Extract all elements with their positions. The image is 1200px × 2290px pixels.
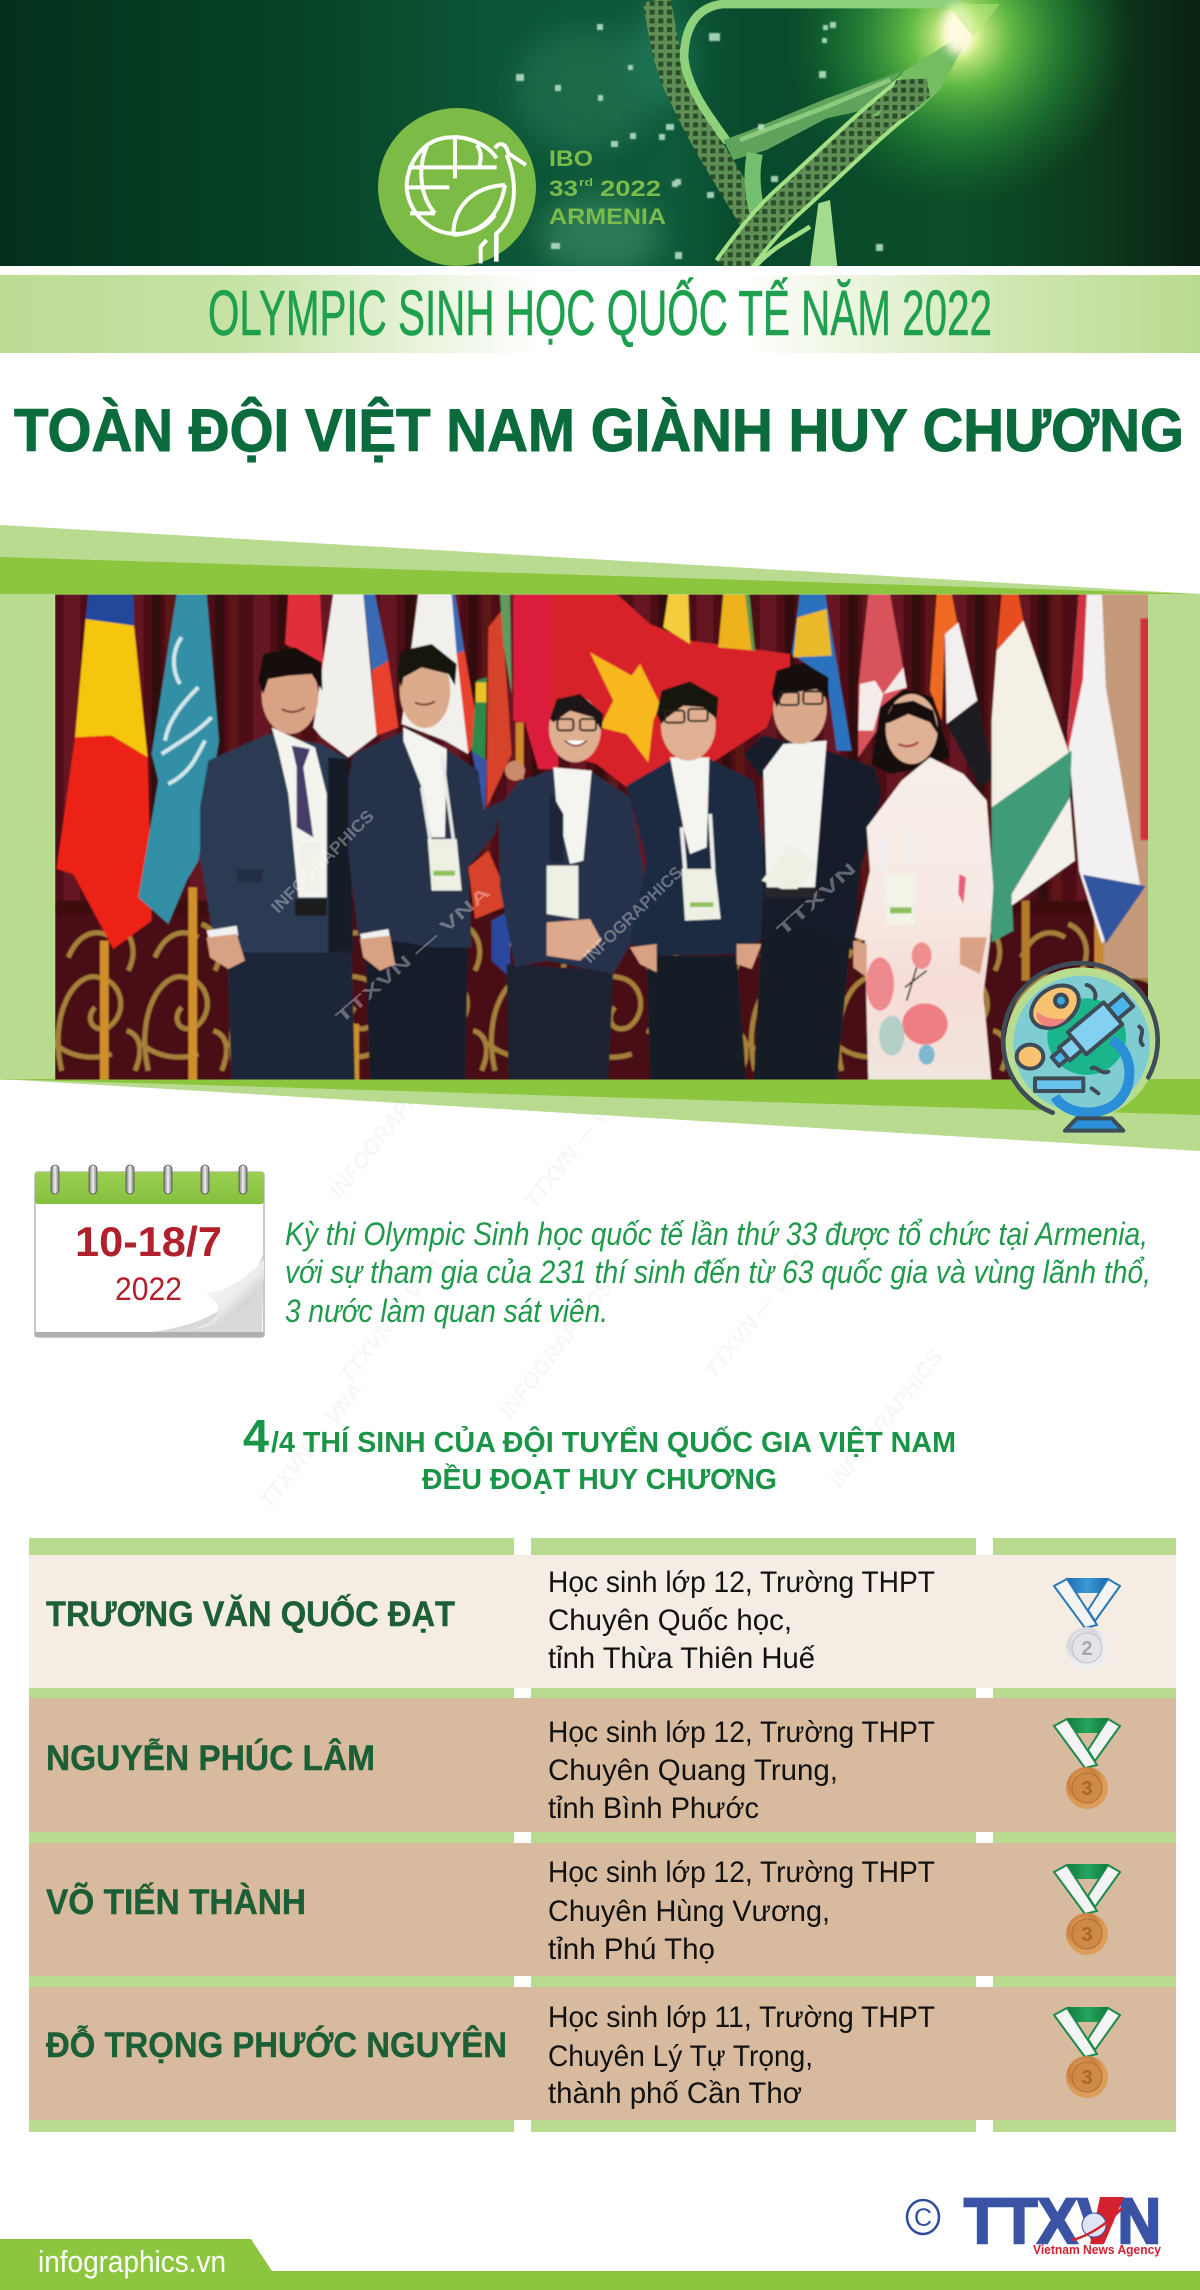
top green wedge <box>0 557 1200 594</box>
globe accent <box>1072 2197 1124 2244</box>
school <box>548 1566 935 1675</box>
faint watermarks: TTXVN — VNA <box>254 1377 368 1513</box>
intro paragraph: 3 nước làm quan sát viên. <box>285 1293 608 1329</box>
faint watermarks: TTXVN — VNA <box>699 1247 813 1383</box>
logo text: 33 <box>549 176 578 201</box>
icon: bronze medal <box>1054 2007 1120 2098</box>
year: 2022 <box>115 1271 182 1307</box>
person: man 4 <box>627 681 767 1084</box>
icon: bronze medal: 3 <box>1081 1778 1093 1800</box>
soft background light <box>515 10 690 275</box>
faint watermarks: INFOGRAPHICS <box>824 1345 948 1493</box>
results heading: /4 THÍ SINH CỦA ĐỘI TUYỂN QUỐC GIA VIỆT NAM <box>271 1425 956 1459</box>
bottom green wedge <box>0 1079 1200 1115</box>
DNA helix <box>657 0 1133 270</box>
faint watermarks: TTXVN — VNA <box>334 1252 448 1388</box>
school: tỉnh Phú Thọ <box>548 1933 715 1966</box>
school: thành phố Cần Thơ <box>548 2077 802 2110</box>
school: tỉnh Thừa Thiên Huế <box>548 1642 815 1675</box>
top light wedge <box>0 525 1200 594</box>
glow <box>804 0 1120 186</box>
results table <box>29 1538 1176 2132</box>
emblem disc <box>378 108 536 266</box>
logo: IBO emblem <box>378 108 666 266</box>
school <box>548 2001 935 2110</box>
person: man 2 <box>348 644 502 1084</box>
subtitle band <box>0 275 1200 353</box>
copyright mark: C <box>914 2204 932 2232</box>
icon: bronze medal: 3 <box>1081 2067 1093 2089</box>
date: 10-18/7 <box>75 1218 222 1265</box>
icon: bronze medal: 3 <box>1081 1924 1093 1946</box>
icon: silver medal: 2 <box>1081 1638 1093 1660</box>
faint watermarks <box>254 985 948 1513</box>
school <box>548 1856 935 1966</box>
separator bars <box>29 1538 1176 2132</box>
faint watermarks: INFOGRAPHICS <box>324 1055 448 1203</box>
wall and far-right flag <box>1066 594 1148 979</box>
logo text: ARMENIA <box>549 204 666 229</box>
school: Học sinh lớp 12, Trường THPT <box>548 1716 935 1749</box>
page curl <box>150 1250 264 1332</box>
faint watermarks: INFOGRAPHICS <box>784 985 908 1133</box>
microscope <box>1035 989 1137 1131</box>
faint watermarks: TTXVN — VNA <box>519 1077 633 1213</box>
footer bar <box>0 2239 1200 2290</box>
person: man 3 <box>498 694 643 1084</box>
calendar page <box>35 1172 264 1337</box>
bacteria <box>1017 977 1143 1093</box>
person: woman in ao dai <box>853 689 993 1084</box>
left mesh strand <box>657 0 753 220</box>
row 2 <box>46 1716 1120 1825</box>
logo text: 2022 <box>600 176 661 201</box>
school: Học sinh lớp 11, Trường THPT <box>548 2001 935 2034</box>
school: Học sinh lớp 12, Trường THPT <box>548 1566 935 1599</box>
icon: calendar with date <box>35 1165 264 1337</box>
photo watermarks: INFOGRAPHICS <box>267 807 378 917</box>
banner background <box>0 0 1200 266</box>
agency tagline: Vietnam News Agency <box>1033 2242 1162 2257</box>
floating particles <box>516 22 883 259</box>
bottom light wedge <box>0 1079 1200 1151</box>
results heading: 4 <box>243 1410 269 1462</box>
globe and crane <box>407 137 526 263</box>
inner stem <box>753 153 758 217</box>
name: TRƯƠNG VĂN QUỐC ĐẠT <box>46 1594 455 1634</box>
side panels <box>0 594 1200 1080</box>
upper loop <box>684 4 960 142</box>
row 3 <box>46 1856 1120 1966</box>
copyright mark <box>907 2200 939 2234</box>
crossing leaf band <box>723 72 900 160</box>
logo text: IBO <box>549 146 593 171</box>
team photo <box>55 591 1156 1084</box>
row backgrounds <box>29 1555 1176 1688</box>
intro paragraph <box>285 1216 1151 1329</box>
bar with tab <box>0 2239 1200 2290</box>
agency letters: TTXVN <box>964 2185 1161 2257</box>
school: Chuyên Lý Tự Trọng, <box>548 2040 813 2073</box>
row 4 <box>46 2001 1120 2110</box>
band background <box>0 275 1200 353</box>
school <box>548 1716 935 1825</box>
school: Học sinh lớp 12, Trường THPT <box>548 1856 935 1889</box>
name: NGUYỄN PHÚC LÂM <box>46 1738 375 1778</box>
logo: TTXVN <box>907 2185 1162 2257</box>
main band with mesh <box>730 90 913 270</box>
school: Chuyên Quốc học, <box>548 1604 792 1637</box>
faint watermarks: INFOGRAPHICS <box>494 1275 618 1423</box>
dress flowers <box>866 942 948 1065</box>
photo watermarks: INFOGRAPHICS <box>580 863 686 967</box>
website: infographics.vn <box>38 2244 226 2279</box>
photo frame with green wedges <box>0 525 1200 1151</box>
bright flare <box>942 5 974 55</box>
icon: silver medal <box>1054 1578 1120 1669</box>
icon: bronze medal <box>1054 1718 1120 1809</box>
icon: microscope badge <box>1003 963 1158 1131</box>
person: man 1 <box>200 647 355 1084</box>
lower stem <box>810 200 837 267</box>
binder rings <box>51 1165 247 1194</box>
logo text <box>550 150 666 224</box>
photo watermarks <box>267 807 860 1027</box>
name: VÕ TIẾN THÀNH <box>46 1882 306 1922</box>
photo watermarks: TTXVN — VNA <box>332 883 494 1027</box>
header banner <box>0 0 1200 275</box>
school: Chuyên Quang Trung, <box>548 1754 838 1787</box>
calendar header <box>35 1172 264 1204</box>
photo watermarks: TTXVN <box>773 859 860 940</box>
school: Chuyên Hùng Vương, <box>548 1895 830 1928</box>
person: man 5 <box>743 662 882 1084</box>
name: ĐỖ TRỌNG PHƯỚC NGUYÊN <box>46 2025 507 2065</box>
results heading: ĐỀU ĐOẠT HUY CHƯƠNG <box>422 1462 777 1496</box>
icon: bronze medal <box>1054 1864 1120 1955</box>
results heading <box>243 1410 956 1496</box>
row 1 <box>46 1566 1120 1675</box>
flags right <box>550 594 1075 981</box>
curtain and drape <box>55 594 1155 1084</box>
logo text: rd <box>579 177 593 189</box>
school: tỉnh Bình Phước <box>548 1792 759 1825</box>
flags left <box>57 594 558 1084</box>
